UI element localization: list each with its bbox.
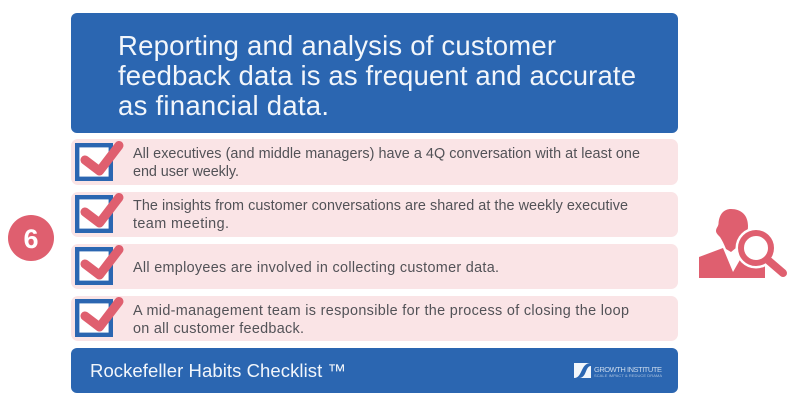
checklist item 1: end user weekly.: [133, 164, 239, 180]
number badge: 6: [23, 224, 39, 254]
checklist item 4: [71, 296, 678, 341]
checklist item 1: [71, 139, 678, 185]
logo: Growth Institute: SCALE IMPACT & REDUCE DRAMA: [594, 373, 662, 378]
logo: Growth Institute: [574, 363, 662, 378]
checklist item 4: on all customer feedback.: [133, 321, 304, 337]
icon: person with magnifying glass: [699, 209, 783, 278]
number badge: [8, 215, 54, 261]
checklist item 2: [71, 192, 678, 237]
checklist item 2: The insights from customer conversations are shared at the weekly executive: [133, 198, 628, 214]
logo: Growth Institute: GROWTH INSTITUTE: [594, 365, 662, 374]
header banner: feedback data is as frequent and accurate: [118, 60, 636, 91]
footer bar: Rockefeller Habits Checklist ™: [90, 360, 346, 381]
checklist item 3: [71, 244, 678, 289]
checklist item 2: team meeting.: [133, 216, 229, 232]
header banner: Reporting and analysis of customer: [118, 30, 556, 61]
header banner: [71, 13, 678, 133]
checklist item 3: All employees are involved in collecting customer data.: [133, 260, 499, 276]
checklist item 4: A mid-management team is responsible for the process of closing the loop: [133, 303, 629, 319]
header banner: as financial data.: [118, 90, 329, 121]
checklist item 1: All executives (and middle managers) have a 4Q conversation with at least one: [133, 146, 640, 162]
footer bar: [71, 348, 678, 393]
